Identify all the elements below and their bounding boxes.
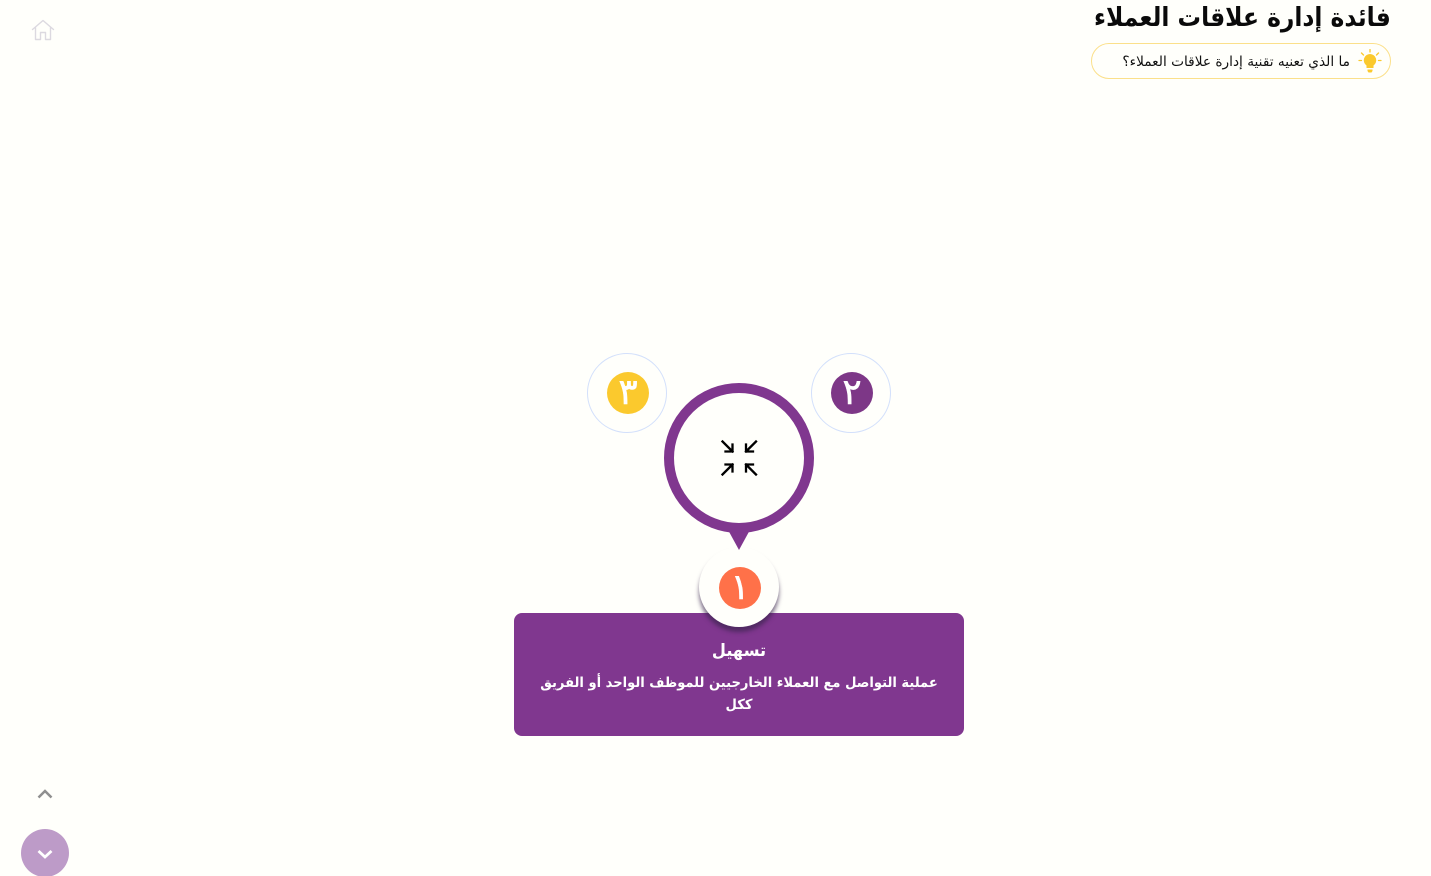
title: فائدة إدارة علاقات العملاء <box>1094 3 1391 33</box>
number 3: ٣ <box>618 372 638 413</box>
panel heading: تسهيل <box>712 641 766 661</box>
step 1 marker <box>699 547 779 627</box>
panel body text: عملية التواصل مع العملاء الخارجيين للموظف الواحد أو الفريق <box>540 675 938 691</box>
icon: home <box>32 20 54 40</box>
pin pointer <box>727 528 751 550</box>
callout: question pill <box>1091 43 1391 79</box>
step 2 marker <box>811 353 891 433</box>
panel: step description <box>514 613 964 736</box>
icon: scroll up chevron <box>38 789 52 798</box>
number 1: ١ <box>730 567 750 608</box>
icon: compress arrows <box>722 442 756 474</box>
central pin with icon <box>664 383 814 550</box>
pin ring <box>669 388 809 528</box>
icon: light bulb <box>1358 49 1382 72</box>
number 1 <box>719 567 761 609</box>
step 3 marker <box>587 353 667 433</box>
chevron down <box>38 851 52 857</box>
question text: ما الذي تعنيه تقنية إدارة علاقات العملاء؟ <box>1122 54 1350 70</box>
number 2 <box>831 372 873 414</box>
panel body text: ككل <box>726 697 752 713</box>
number 2: ٢ <box>842 372 862 413</box>
panel body text <box>540 673 938 713</box>
button: scroll down <box>21 829 69 876</box>
number 3 <box>607 372 649 414</box>
